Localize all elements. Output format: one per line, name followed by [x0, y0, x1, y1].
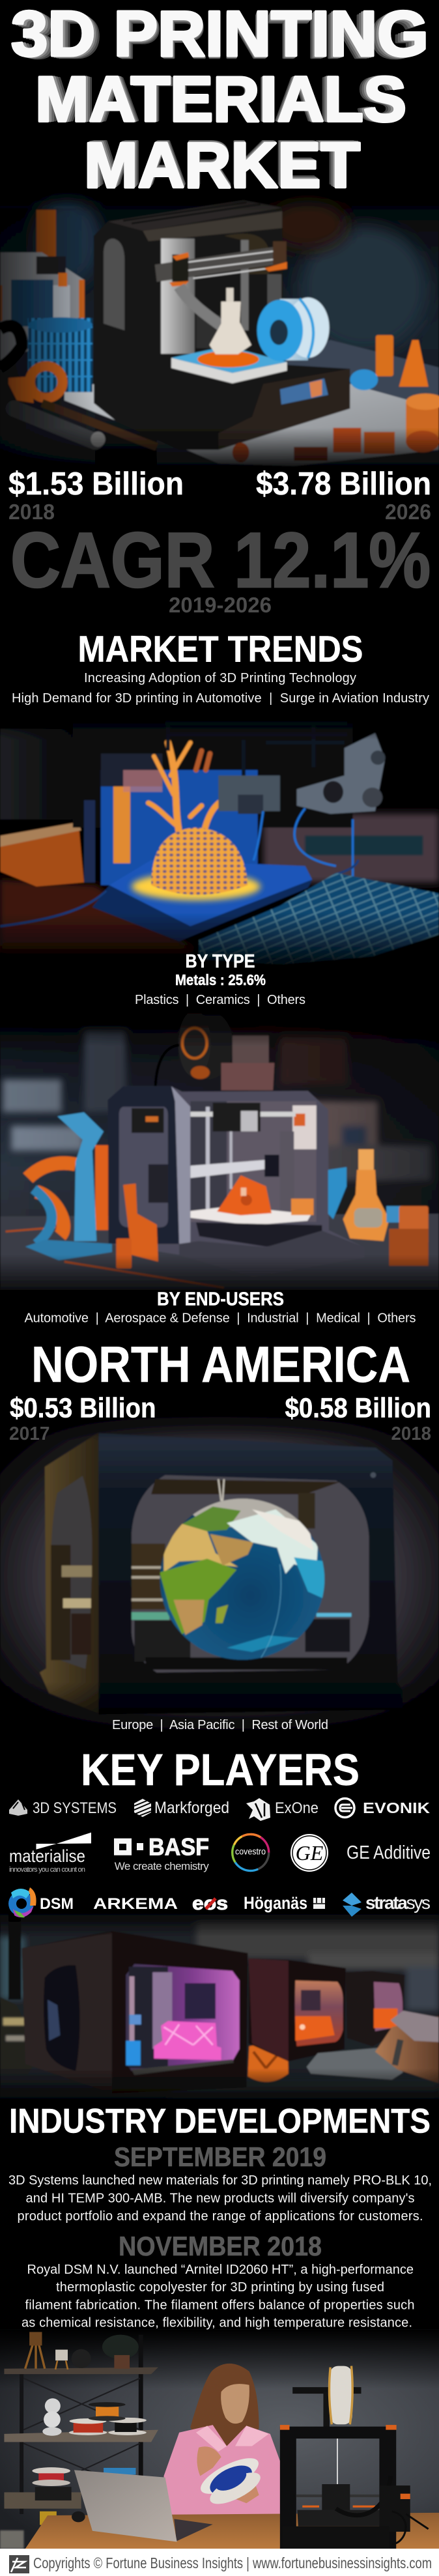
- logo: DSM: [8, 1887, 74, 1917]
- logo: Hoganas: Höganäs: [244, 1893, 307, 1913]
- heading: key players: KEY PLAYERS: [81, 1745, 360, 1795]
- logo: DSM: DSM: [40, 1895, 74, 1913]
- logo: 3D Systems: 3D SYSTEMS: [33, 1799, 117, 1817]
- logo: BASF: We create chemistry: [115, 1860, 209, 1872]
- icon: Fortune Business Insights logo: [9, 2555, 29, 2573]
- title: 3D Printing Materials Market: MARKET: [90, 128, 354, 196]
- development: November 2018: [21, 2231, 414, 2330]
- title: 3D Printing Materials Market: MARKET: [86, 129, 358, 200]
- title: 3D Printing Materials Market: 3D PRINTING: [18, 2, 422, 71]
- logo: ExOne: ExOne: [275, 1799, 319, 1817]
- title: 3D Printing Materials Market: MATERIALS: [40, 65, 401, 134]
- title: 3D Printing Materials Market: MATERIALS: [44, 64, 398, 133]
- image: grey printer with orange and blue printed parts: [0, 1005, 439, 1300]
- logo: Materialise: materialise: [9, 1846, 85, 1866]
- section: North America: 2018: [391, 1424, 431, 1444]
- logo: Stratasys: stratasys: [365, 1893, 431, 1913]
- development: November 2018: Royal DSM N.V. launched “Arnitel ID2060 HT”, a high-performance: [27, 2263, 414, 2277]
- image: 3D printer with blue filament spool: [0, 181, 439, 473]
- logo: 3D Systems: [9, 1799, 117, 1817]
- title: 3D Printing Materials Market: 3D PRINTING: [20, 3, 419, 71]
- section: by end-users: [25, 1289, 416, 1325]
- footer: [0, 2549, 439, 2576]
- section: market trends: Increasing Adoption of 3D Printing Technology: [84, 671, 356, 685]
- development: November 2018: thermoplastic copolyester for 3D printing by using fused: [56, 2280, 384, 2295]
- section: by end-users: Automotive | Aerospace & Defense | Industrial | Medical | Others: [25, 1311, 416, 1325]
- development: November 2018: NOVEMBER 2018: [119, 2231, 322, 2261]
- section: market trends: [12, 628, 429, 706]
- image: row of enclosed printers with magenta print: [0, 1909, 439, 2105]
- logo: BASF: [114, 1834, 209, 1872]
- logo: EOS: eos: [192, 1893, 228, 1914]
- section: North America: [9, 1336, 431, 1444]
- logo: Covestro: covestro: [235, 1846, 266, 1857]
- logo: Stratasys: [343, 1893, 431, 1917]
- section: by type: Plastics | Ceramics | Others: [135, 993, 305, 1007]
- stat: market size 2018: [8, 466, 184, 524]
- section: by type: BY TYPE: [185, 951, 255, 972]
- title: 3D Printing Materials Market: MARKET: [84, 130, 360, 201]
- section: by type: [135, 951, 305, 1007]
- development: September 2019: [8, 2141, 432, 2224]
- stat: market size 2026: $3.78 Billion: [256, 466, 431, 502]
- title: 3D Printing Materials Market: 3D PRINTING: [14, 0, 425, 70]
- development: November 2018: filament fabrication. The filament offers balance of properties such: [25, 2298, 414, 2313]
- section: market trends: MARKET TRENDS: [78, 628, 363, 670]
- logos: key players: [8, 1798, 431, 1917]
- logo: Materialise: innovators you can count on: [9, 1866, 85, 1874]
- stat: market size 2026: 2026: [385, 500, 431, 524]
- title: 3D Printing Materials Market: [11, 0, 429, 201]
- logo: Arkema: ARKEMA: [93, 1895, 178, 1913]
- section: by end-users: BY END-USERS: [157, 1289, 284, 1309]
- section: by type: Metals : 25.6%: [175, 971, 266, 988]
- section: market trends: High Demand for 3D printing in Automotive | Surge in Aviation Industry: [12, 691, 429, 706]
- section: North America: $0.53 Billion: [10, 1393, 156, 1424]
- development: September 2019: SEPTEMBER 2019: [114, 2141, 326, 2172]
- development: November 2018: as chemical resistance, flexibility, and high temperature resistance.: [21, 2315, 412, 2330]
- stat: market size 2026: [256, 466, 431, 524]
- development: September 2019: 3D Systems launched new materials for 3D printing namely PRO-BLK 10,: [8, 2173, 432, 2188]
- logo: GE: GE: [296, 1841, 324, 1865]
- logo: ExOne: [246, 1798, 319, 1821]
- logo: Evonik: [335, 1798, 430, 1818]
- logo: Markforged: Markforged: [154, 1799, 229, 1817]
- image: woman holding filament spool beside a printer: [0, 2329, 439, 2549]
- logo: GE: [290, 1834, 328, 1872]
- text: other regions: Europe | Asia Pacific | Rest of World: [112, 1718, 328, 1732]
- logo: Materialise: [9, 1833, 91, 1874]
- title: 3D Printing Materials Market: MARKET: [88, 129, 356, 198]
- section: North America: 2017: [9, 1424, 50, 1444]
- development: September 2019: and HI TEMP 300-AMB. The new products will diversify company's: [26, 2192, 414, 2206]
- image: coral-shaped print under a blue-lit printer: [0, 713, 439, 973]
- logo: BASF: BASF: [149, 1834, 209, 1861]
- development: September 2019: product portfolio and expand the range of applications for customers.: [17, 2209, 423, 2224]
- stat: market size 2018: 2018: [8, 500, 55, 524]
- logo: Covestro: [233, 1835, 269, 1871]
- logo: Evonik: EVONIK: [363, 1799, 430, 1816]
- title: 3D Printing Materials Market: MATERIALS: [35, 63, 406, 135]
- stat: CAGR: 2019-2026: [169, 593, 272, 617]
- title: 3D Printing Materials Market: MATERIALS: [38, 63, 404, 134]
- image: earth globe inside a printer frame: [0, 1410, 439, 1739]
- stat: market size 2018: $1.53 Billion: [8, 466, 184, 502]
